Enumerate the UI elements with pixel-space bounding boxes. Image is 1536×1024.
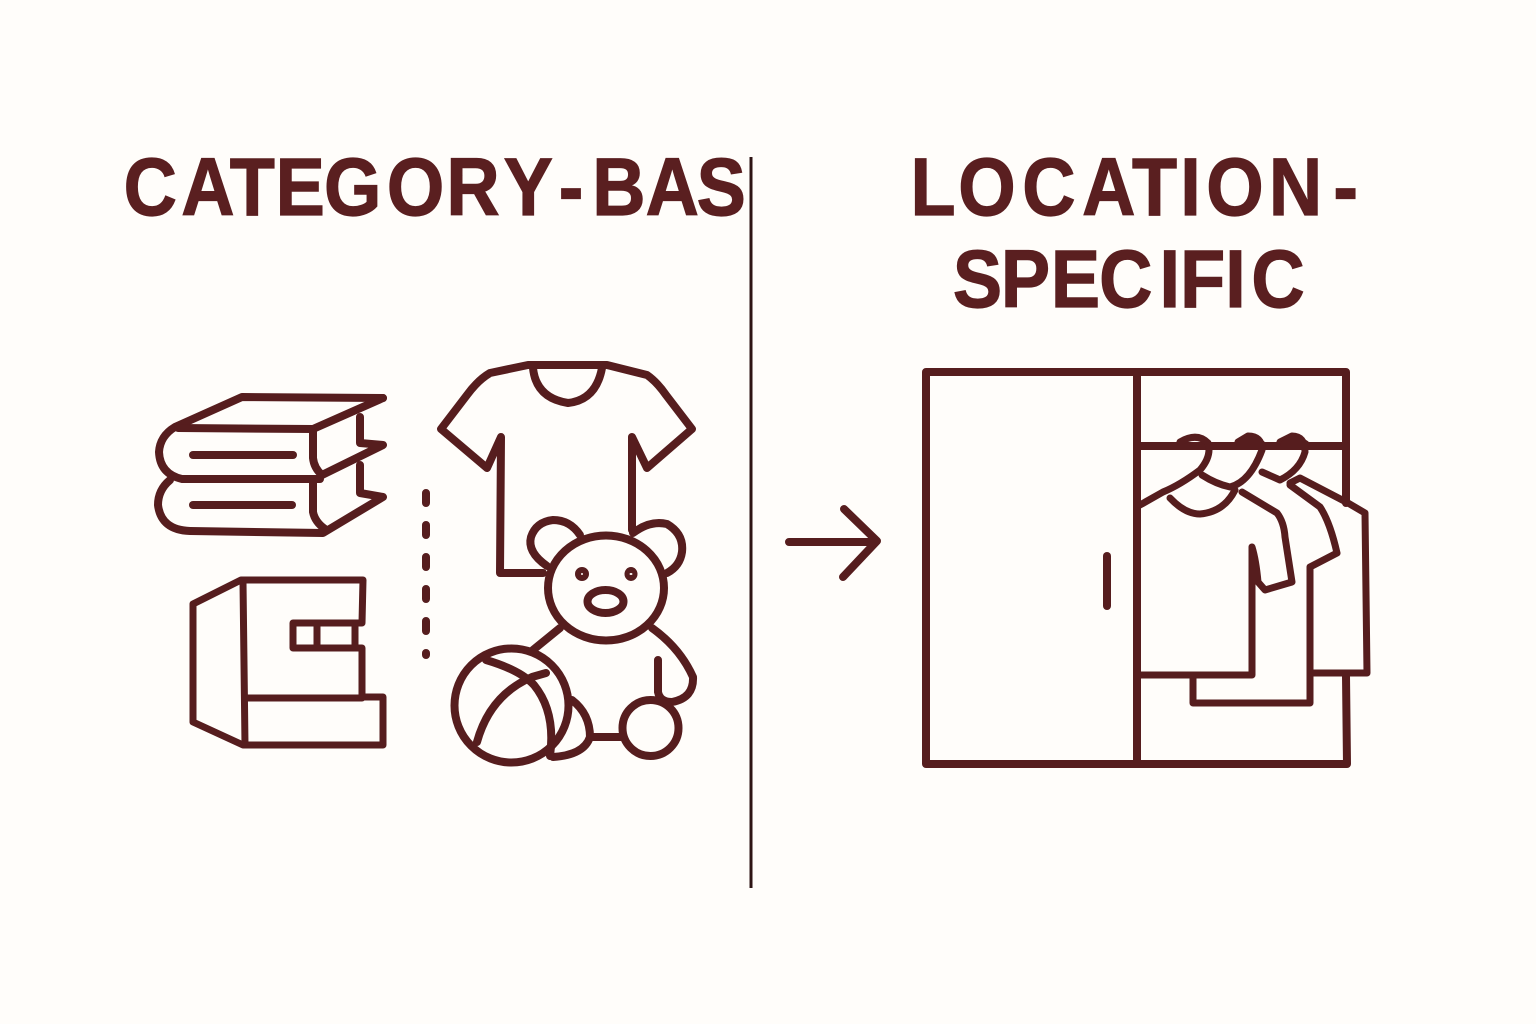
left heading: CATEGORY-BAS xyxy=(124,140,746,233)
icon: t-shirt xyxy=(441,365,692,573)
icon: stacked books xyxy=(158,397,383,533)
icon: wardrobe xyxy=(926,372,1347,764)
dashed separator xyxy=(422,493,430,655)
right heading xyxy=(911,140,1358,325)
center divider xyxy=(750,157,752,888)
right heading: LOCATION- xyxy=(911,140,1358,233)
arrow xyxy=(789,509,877,577)
icon: box appliance xyxy=(193,580,383,745)
icon: teddy bear xyxy=(530,520,693,757)
icon: hanging shirts xyxy=(1137,436,1367,703)
right heading: SPECIFIC xyxy=(953,232,1305,325)
icon: ball xyxy=(454,648,568,762)
